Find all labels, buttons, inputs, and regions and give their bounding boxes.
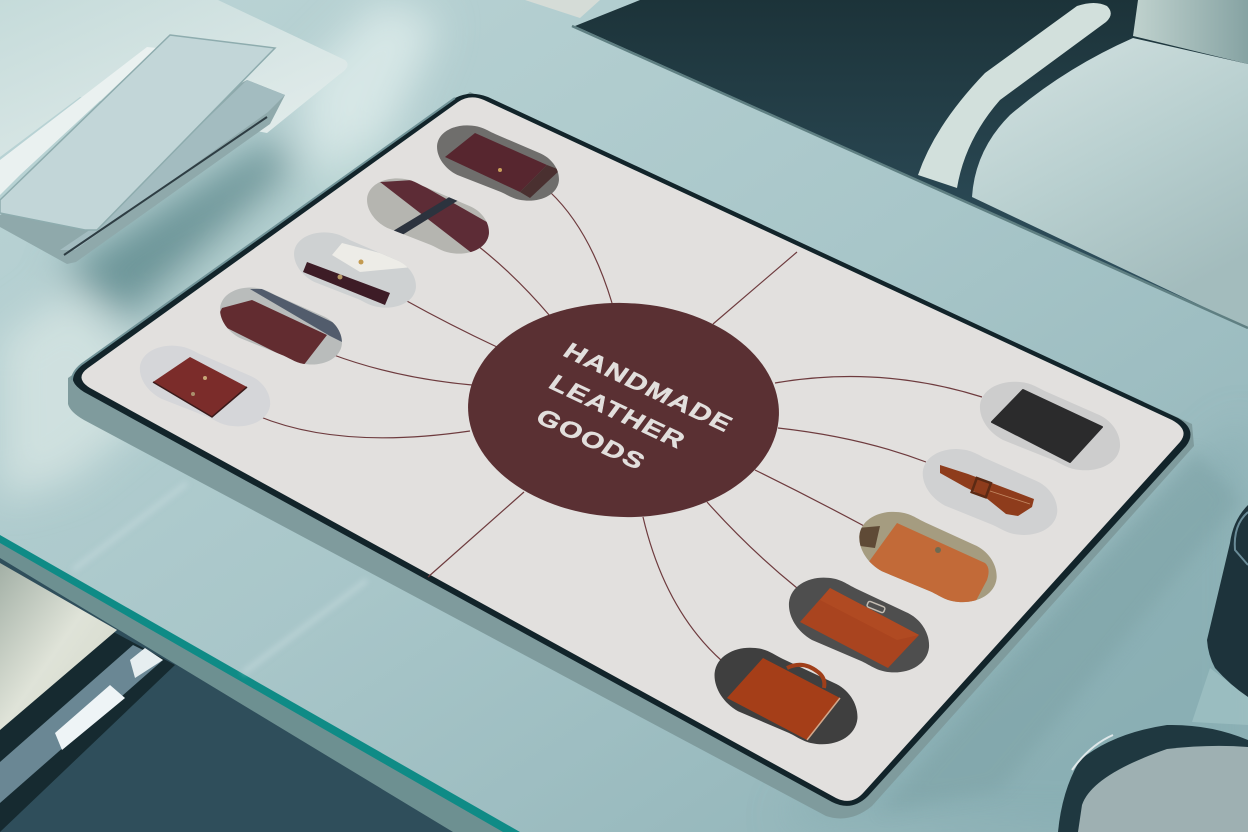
white cushion at table top xyxy=(525,0,600,18)
item: long burgundy wallet xyxy=(215,287,345,366)
tablet shadow xyxy=(880,452,1240,812)
chair arm xyxy=(918,3,1111,188)
dark cup, right edge xyxy=(1207,505,1248,697)
glass dish, bottom right xyxy=(1058,725,1248,832)
item: handled bag xyxy=(715,648,857,744)
connector lines xyxy=(258,192,982,661)
item: tan pouch xyxy=(858,512,997,612)
folder cushion xyxy=(0,0,348,157)
chair back xyxy=(1133,0,1248,64)
office chair xyxy=(918,0,1248,328)
chair seat xyxy=(972,38,1248,328)
item: burgundy strap on grey xyxy=(367,178,492,260)
floor: upper right xyxy=(575,0,1248,328)
table edge highlight xyxy=(572,26,1248,328)
glass table edge xyxy=(0,535,520,832)
item: black wallet xyxy=(980,382,1120,470)
item: leather belt xyxy=(923,449,1057,535)
title xyxy=(531,338,739,475)
item: pen case on white envelope xyxy=(294,232,416,308)
title: HANDMADE xyxy=(558,338,739,437)
lower floor xyxy=(0,540,510,832)
reflection under cup xyxy=(1192,668,1248,725)
item: small red wallet xyxy=(140,346,270,426)
upper-left bezel highlight xyxy=(72,98,455,380)
cup rim highlight xyxy=(1235,512,1248,565)
title: LEATHER xyxy=(544,370,692,454)
item: wallet burgundy xyxy=(437,125,560,201)
dark shadow beside chrome leg xyxy=(0,630,175,832)
chrome leg xyxy=(0,645,163,803)
white seat, lower left xyxy=(0,563,117,730)
title: GOODS xyxy=(531,404,652,475)
stacked documents xyxy=(0,35,285,264)
table reflection streaks xyxy=(73,483,367,673)
tablet screen xyxy=(81,97,1184,801)
tablet bezel xyxy=(72,94,1190,806)
item: flap briefcase xyxy=(789,578,929,672)
central circle xyxy=(464,298,783,522)
tablet body xyxy=(68,92,1194,818)
